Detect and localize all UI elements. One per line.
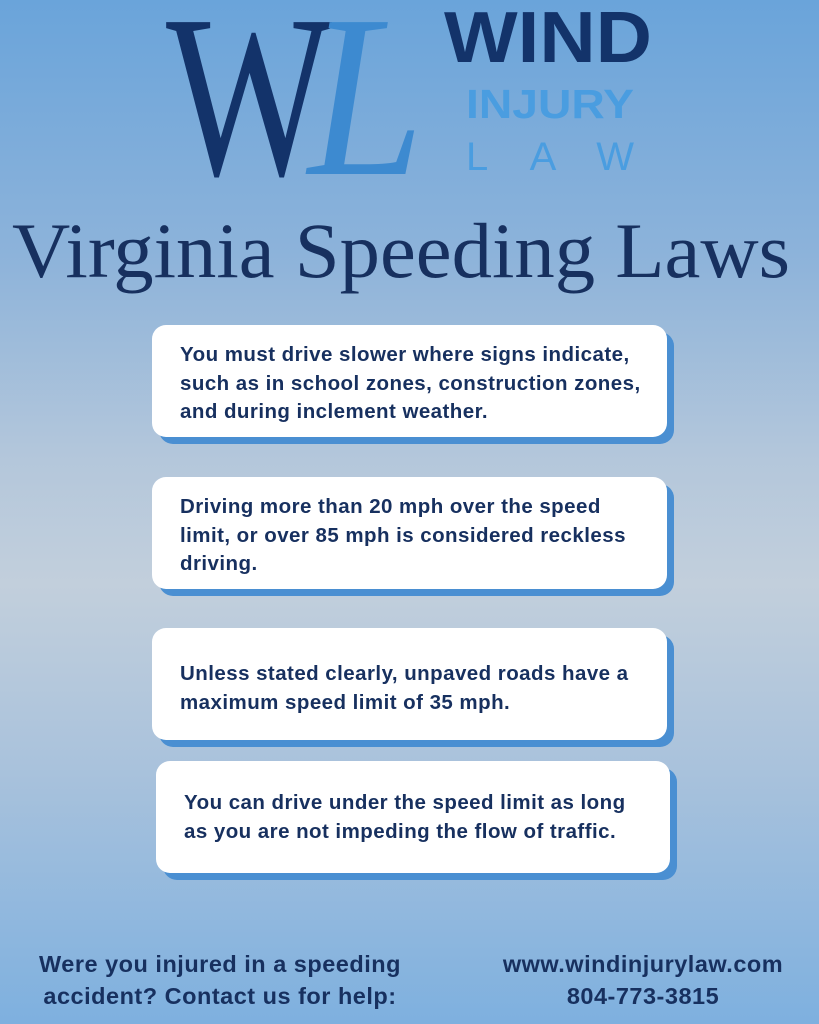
footer: call to action: accident? Contact us for help: bbox=[43, 983, 397, 1009]
footer: contact details: www.windinjurylaw.com bbox=[503, 951, 783, 977]
card 4 bbox=[156, 761, 670, 873]
card 4: You can drive under the speed limit as long bbox=[184, 791, 626, 814]
card 2: driving. bbox=[180, 552, 258, 575]
footer: contact details: 804-773-3815 bbox=[567, 983, 719, 1009]
card 3: Unless stated clearly, unpaved roads have a bbox=[180, 662, 629, 685]
logo wordmark: INJURY bbox=[466, 81, 634, 127]
title: Virginia Speeding Laws bbox=[12, 207, 790, 294]
footer: call to action bbox=[39, 951, 401, 1009]
logo wordmark: WIND bbox=[444, 0, 652, 78]
card 1: You must drive slower where signs indicate, bbox=[180, 343, 630, 366]
card 3 bbox=[152, 628, 667, 740]
card 1 bbox=[152, 325, 667, 437]
card 1: such as in school zones, construction zones, bbox=[180, 372, 641, 394]
logo bbox=[166, 0, 652, 190]
card 2: Driving more than 20 mph over the speed bbox=[180, 495, 601, 518]
footer: contact details bbox=[502, 951, 783, 1009]
card 2: limit, or over 85 mph is considered reckless bbox=[180, 524, 626, 546]
card 2 bbox=[152, 477, 667, 589]
footer: call to action: Were you injured in a speeding bbox=[39, 951, 401, 977]
logo wordmark: LAW bbox=[466, 135, 634, 179]
card 4: as you are not impeding the flow of traffic. bbox=[184, 820, 616, 842]
logo wordmark bbox=[444, 0, 652, 179]
card 1: and during inclement weather. bbox=[180, 400, 488, 423]
card 3: maximum speed limit of 35 mph. bbox=[180, 690, 510, 714]
